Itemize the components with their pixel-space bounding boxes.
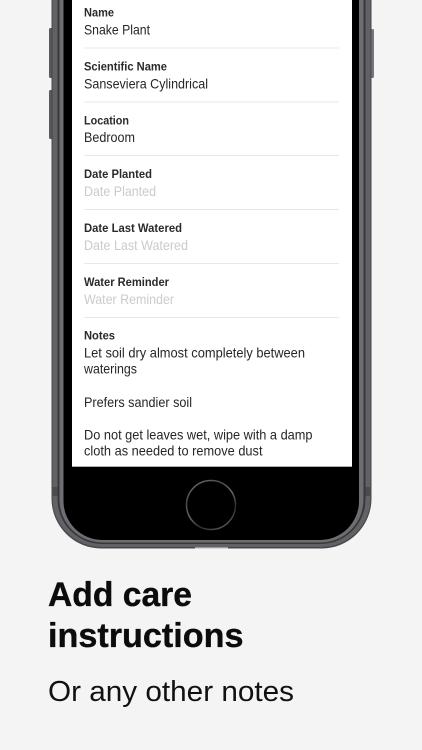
screen	[72, 0, 352, 467]
field: date planted	[84, 167, 156, 199]
field: name	[84, 6, 150, 38]
field: date planted: Date Planted	[84, 183, 156, 199]
field: notes: waterings	[83, 360, 137, 376]
phone mockup	[49, 0, 374, 549]
icon: left volume up button	[49, 28, 53, 78]
heading	[48, 576, 244, 655]
field: water reminder: Water Reminder	[84, 275, 169, 289]
field: water reminder: Water Reminder	[84, 291, 174, 307]
field: scientific name: Scientific Name	[84, 60, 167, 74]
field: scientific name: Sanseviera Cylindrical	[84, 75, 208, 91]
field: date last watered: Date Last Watered	[84, 221, 182, 235]
field: notes	[83, 329, 313, 459]
field: location	[84, 114, 135, 145]
field: notes: cloth as needed to remove dust	[84, 443, 263, 459]
field: water reminder	[84, 275, 174, 307]
field: name: Name	[84, 6, 114, 20]
field: location: Location	[84, 114, 129, 128]
subheading: Or any other notes	[48, 676, 294, 708]
phone body	[52, 0, 372, 549]
field: location: Bedroom	[84, 129, 135, 145]
icon: right side button	[370, 29, 374, 78]
heading: instructions	[48, 617, 244, 655]
field: scientific name	[84, 60, 208, 91]
field: date planted: Date Planted	[84, 167, 152, 181]
field: notes: Do not get leaves wet, wipe with a damp	[84, 426, 313, 442]
icon: left volume down button	[49, 90, 53, 139]
field: date last watered	[84, 221, 188, 253]
icon: home button	[186, 480, 236, 530]
heading: Add care	[48, 576, 192, 614]
field: name: Snake Plant	[84, 22, 150, 38]
field: notes: Notes	[84, 329, 115, 343]
field: date last watered: Date Last Watered	[84, 237, 188, 253]
field: notes: Let soil dry almost completely between	[84, 344, 305, 360]
field: notes: Prefers sandier soil	[84, 394, 192, 410]
